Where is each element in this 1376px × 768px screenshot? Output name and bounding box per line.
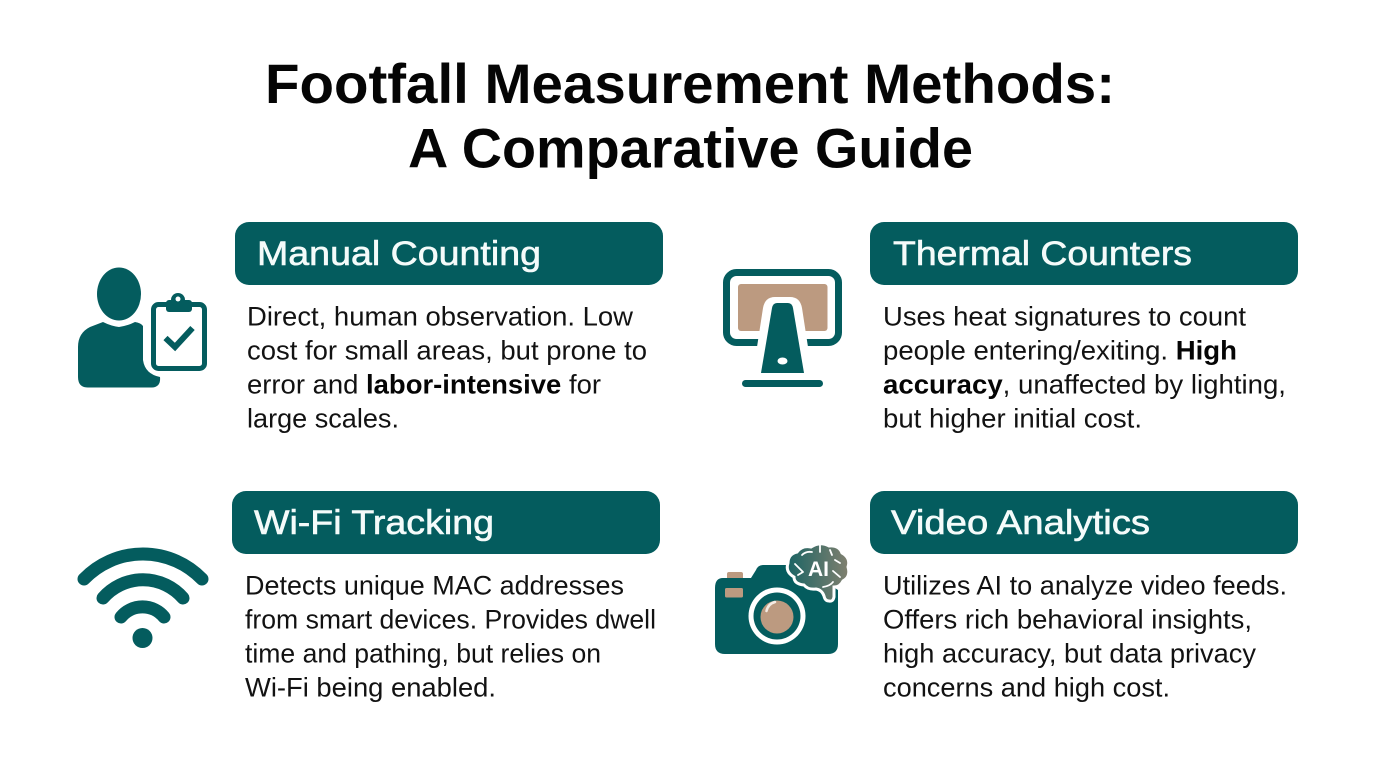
panel: manual counting [78,222,663,434]
text: thermal counters description: Uses heat signatures to count [883,302,1247,332]
text: wi-fi tracking description: from smart devices. Provides dwell [245,604,656,634]
text: video analytics description: Offers rich behavioral insights, [883,604,1252,634]
icon: thermal counter [726,272,838,387]
icon: person with clipboard [78,268,204,388]
text: thermal counters description: but higher initial cost. [883,404,1142,434]
text: video analytics description [883,570,1287,702]
icon: wi-fi signal [84,554,202,648]
text: wi-fi tracking description: Wi-Fi being enabled. [245,672,496,702]
icon: camera with AI brain [715,544,849,654]
heading: manual counting: Manual Counting [257,235,541,273]
panel: video analytics [715,491,1298,702]
heading: thermal counters: Thermal Counters [893,235,1192,273]
panel: thermal counters [726,222,1298,434]
text: video analytics description: Utilizes AI to analyze video feeds. [883,570,1287,600]
panel: wi-fi tracking [84,491,660,702]
heading: video analytics [870,491,1298,554]
title: A Comparative Guide [408,116,973,180]
text: video analytics description: concerns and high cost. [883,672,1170,702]
text: thermal counters description: people entering/exiting. High [883,336,1237,366]
heading: thermal counters [870,222,1298,285]
text: manual counting description: Direct, human observation. Low [247,302,634,332]
heading: wi-fi tracking: Wi-Fi Tracking [254,504,494,542]
heading: wi-fi tracking [232,491,660,554]
heading: manual counting [235,222,663,285]
text: manual counting description [247,302,647,434]
text: thermal counters description [883,302,1286,434]
icon: AI brain: AI [808,558,829,581]
title [265,52,1115,180]
text: manual counting description: error and labor-intensive for [247,370,601,400]
text: thermal counters description: accuracy, unaffected by lighting, [883,370,1286,400]
text: manual counting description: large scales. [247,404,399,434]
title: Footfall Measurement Methods: [265,52,1115,115]
heading: video analytics: Video Analytics [891,504,1150,542]
text: wi-fi tracking description: time and pathing, but relies on [245,638,601,668]
text: wi-fi tracking description [245,570,656,702]
text: wi-fi tracking description: Detects unique MAC addresses [245,570,624,600]
text: video analytics description: high accuracy, but data privacy [883,638,1257,668]
text: manual counting description: cost for small areas, but prone to [247,336,647,366]
